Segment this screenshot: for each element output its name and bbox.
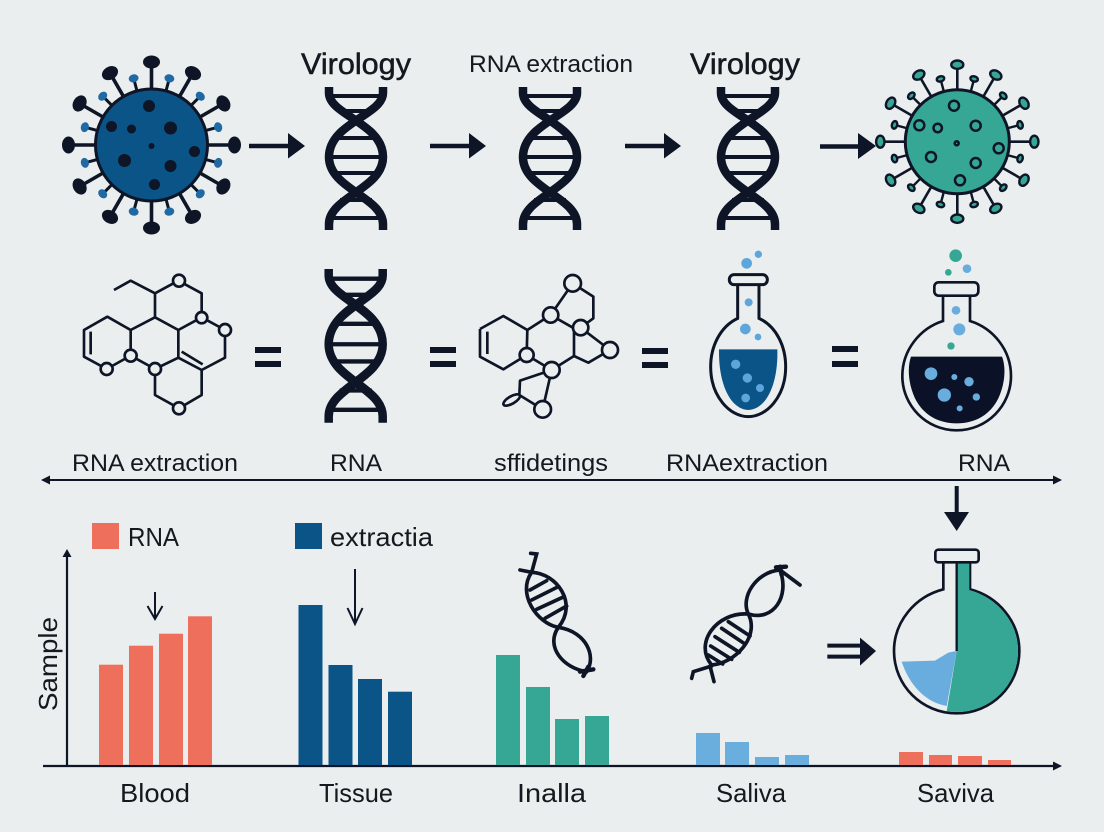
double arrow to flask <box>827 638 876 666</box>
label: RNA: RNA <box>330 450 382 477</box>
legend: RNA: RNA <box>128 522 180 552</box>
icon: broken DNA left <box>520 553 593 676</box>
legend: extractia: extractia <box>330 522 434 552</box>
arrow 3 <box>625 133 681 158</box>
heading: Virology right: Virology <box>690 48 800 81</box>
label: RNAextraction: RNAextraction <box>666 450 828 477</box>
double-headed divider arrow <box>41 476 1062 484</box>
legend: RNA <box>92 522 180 552</box>
label: sffidetings: sffidetings <box>494 450 608 477</box>
axis label: Sample: Sample <box>33 617 63 711</box>
label: RNA extraction: RNA extraction <box>72 450 238 477</box>
equals sign 2 <box>430 347 456 367</box>
icon: DNA top 2 <box>523 87 577 230</box>
arrow 4 <box>820 133 876 159</box>
heading: RNA extraction top: RNA extraction <box>469 51 633 78</box>
icon: pie flask <box>894 550 1019 713</box>
bars: Inalla <box>496 655 609 765</box>
heading: Virology left: Virology <box>301 48 411 81</box>
label: Tissue: Tissue <box>319 778 393 808</box>
small arrow: Tissue <box>348 569 362 624</box>
icon: blue flask <box>711 251 786 417</box>
label: RNA right: RNA <box>958 450 1010 477</box>
label: Blood: Blood <box>120 778 190 808</box>
arrow 1 <box>249 133 305 158</box>
bars: Saliva <box>696 733 809 765</box>
icon: DNA middle <box>329 269 383 423</box>
icon: molecule right <box>480 275 618 418</box>
arrow down to flask <box>944 486 969 531</box>
small arrow: Blood <box>148 592 162 619</box>
arrow 2 <box>430 133 486 158</box>
icon: DNA top 1 <box>329 87 383 230</box>
bars: Tissue <box>298 605 412 765</box>
equals sign 3 <box>642 348 668 368</box>
bars: Blood <box>99 616 212 765</box>
chart axes <box>43 549 1062 770</box>
icon: teal virus <box>876 60 1038 223</box>
label: Inalla: Inalla <box>517 778 587 808</box>
icon: blue virus <box>62 56 241 234</box>
icon: DNA top 3 <box>721 87 775 230</box>
label: Saviva: Saviva <box>917 778 995 808</box>
icon: broken DNA right <box>692 567 800 682</box>
icon: dark flask <box>902 249 1011 430</box>
label: Saliva: Saliva <box>716 778 787 808</box>
icon: molecule left <box>84 275 231 414</box>
equals sign 1 <box>255 347 281 367</box>
equals sign 4 <box>832 346 858 367</box>
bars: Saviva <box>899 752 1011 765</box>
